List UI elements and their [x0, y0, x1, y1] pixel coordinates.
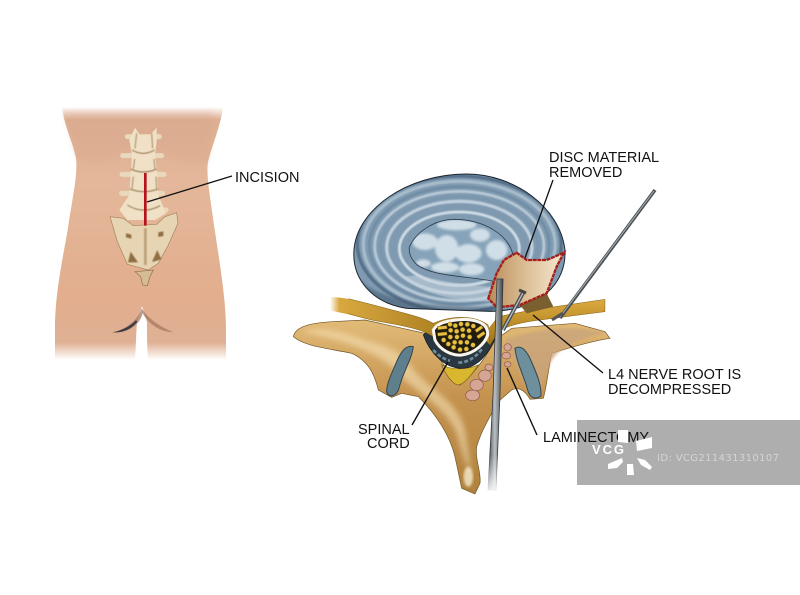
cord outline	[433, 319, 488, 355]
right wing shading	[505, 329, 605, 397]
intervertebral disc	[350, 170, 570, 313]
nerve root label: L4 NERVE ROOT IS	[608, 367, 741, 383]
disc material label: REMOVED	[549, 165, 622, 181]
spinal cord label: CORD	[367, 436, 410, 452]
incision label: INCISION	[235, 170, 299, 186]
incision leader line	[147, 176, 232, 202]
bone chips	[466, 344, 511, 401]
disc outline	[354, 174, 565, 311]
buttock crease	[113, 308, 173, 332]
spinal cord leader line	[412, 362, 448, 425]
nerve root leader line	[533, 315, 603, 373]
watermark logo: VCG	[592, 442, 624, 457]
spinal cord label: SPINAL	[358, 422, 410, 438]
dura ring	[423, 327, 496, 368]
removed base shadow	[520, 293, 553, 313]
bone highlight	[302, 329, 471, 470]
right facet	[515, 347, 541, 398]
sacrum	[110, 213, 178, 270]
forceps instrument	[484, 279, 526, 495]
back shading	[63, 112, 213, 163]
buttock shadow	[113, 320, 137, 332]
nerve fibres	[438, 322, 485, 352]
removed disc material	[488, 253, 564, 307]
torso	[55, 107, 226, 360]
nucleus	[410, 220, 512, 281]
left facet	[387, 346, 413, 396]
watermark id: ID: VCG211431310107	[657, 453, 779, 464]
watermark banner	[543, 420, 800, 485]
coccyx	[135, 270, 153, 286]
sacral shading	[126, 228, 163, 265]
watermark logo	[592, 430, 652, 475]
lumbar spine	[119, 128, 166, 220]
laminectomy label: LAMINECTOMY	[543, 430, 649, 446]
probe instrument	[552, 190, 655, 320]
laminectomy leader line	[507, 368, 537, 435]
annulus	[350, 170, 570, 313]
spinous tip highlight	[464, 467, 473, 487]
vertebra bone	[293, 320, 610, 494]
spinal cord cross-section	[433, 319, 488, 355]
back illustration	[55, 107, 299, 360]
nerve root label: DECOMPRESSED	[608, 382, 731, 398]
nucleus outline	[409, 219, 513, 282]
incision	[144, 173, 147, 226]
vertebra illustration	[293, 297, 610, 494]
disc material leader line	[525, 180, 553, 258]
fat	[442, 365, 478, 385]
left and right nerve root	[330, 297, 605, 345]
disc material label: DISC MATERIAL	[549, 150, 659, 166]
